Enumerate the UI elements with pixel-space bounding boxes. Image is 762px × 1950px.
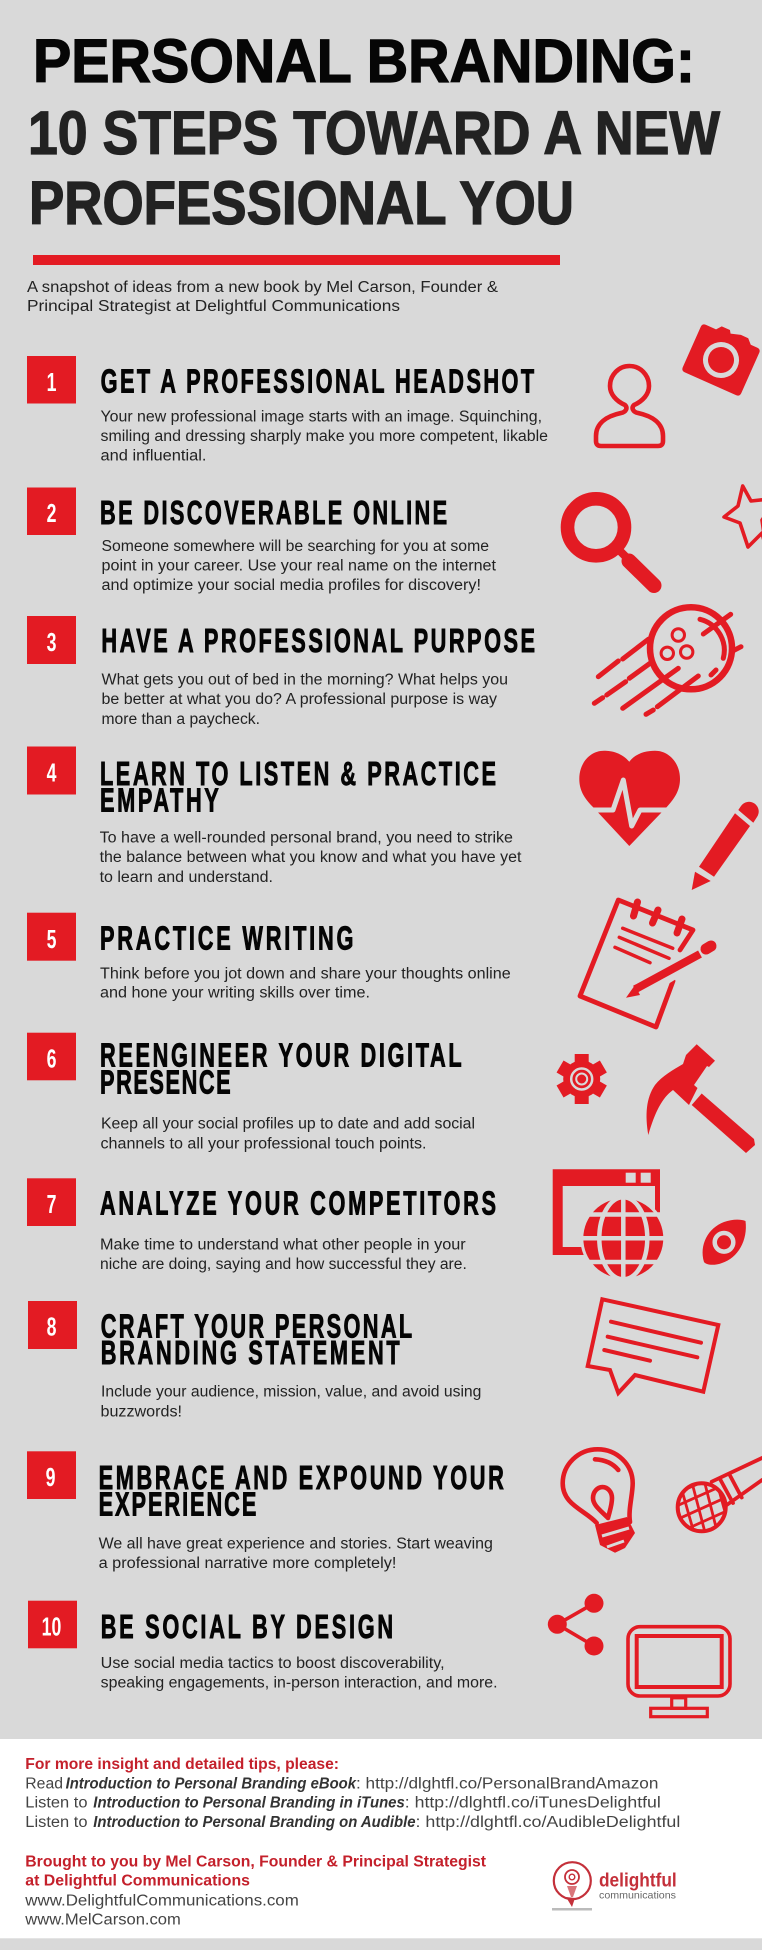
footer: more insight links: For more insight and detailed tips, please: bbox=[25, 1756, 339, 1773]
body text 1 bbox=[100, 409, 548, 464]
body text 8: buzzwords! bbox=[100, 1403, 182, 1420]
body text 3: more than a paycheck. bbox=[102, 711, 260, 728]
number badge 8: 8 bbox=[47, 1312, 56, 1341]
body text 5 bbox=[100, 965, 511, 1002]
body text 6: channels to all your professional touch points. bbox=[100, 1135, 426, 1152]
icon: pencil bbox=[692, 802, 759, 890]
title: PERSONAL BRANDING: bbox=[33, 27, 695, 95]
footer: credits: www.MelCarson.com bbox=[24, 1912, 181, 1929]
logo: delightful communications bbox=[552, 1862, 677, 1910]
icon: camera bbox=[681, 319, 762, 397]
heading 4: EMPATHY bbox=[100, 782, 219, 819]
heading 2: BE DISCOVERABLE ONLINE bbox=[100, 494, 447, 531]
footer: credits: at Delightful Communications bbox=[25, 1873, 250, 1890]
footer: credits bbox=[24, 1854, 486, 1929]
body text 10 bbox=[101, 1655, 497, 1692]
body text 2 bbox=[102, 538, 497, 594]
body text 1: smiling and dressing sharply make you more competent, likable bbox=[100, 428, 548, 445]
step 9 bbox=[27, 1451, 504, 1572]
body text 9: a professional narrative more completely! bbox=[99, 1555, 396, 1572]
heading 1: GET A PROFESSIONAL HEADSHOT bbox=[101, 363, 534, 400]
step 4 bbox=[27, 746, 522, 886]
footer: credits: Brought to you by Mel Carson, Founder & Principal Strategist bbox=[25, 1854, 486, 1871]
footer: more insight links: Introduction to Personal Branding on Audible bbox=[93, 1814, 416, 1831]
step 6 bbox=[27, 1033, 475, 1152]
subtitle: A snapshot of ideas from a new book by Mel Carson, Founder & bbox=[27, 279, 499, 296]
heading 4: LEARN TO LISTEN & PRACTICE bbox=[100, 755, 496, 792]
red title rule bbox=[33, 255, 560, 265]
body text 3: What gets you out of bed in the morning? What helps you bbox=[102, 672, 508, 689]
heading 8: BRANDING STATEMENT bbox=[101, 1334, 400, 1371]
icon: eye bbox=[703, 1220, 746, 1265]
icon: monitor bbox=[628, 1627, 730, 1717]
icon: browser window with globe bbox=[553, 1169, 667, 1281]
footer: more insight links: : http://dlghtfl.co/iTunesDelightful bbox=[405, 1795, 661, 1812]
icon: person outline bbox=[596, 366, 663, 446]
body text 4 bbox=[100, 830, 522, 886]
body text 7: niche are doing, saying and how successful they are. bbox=[100, 1256, 467, 1273]
number badge 4: 4 bbox=[47, 758, 57, 787]
heading 7: ANALYZE YOUR COMPETITORS bbox=[100, 1185, 496, 1222]
body text 7: Make time to understand what other people in your bbox=[100, 1236, 466, 1253]
body text 2: and optimize your social media profiles for discovery! bbox=[102, 577, 481, 594]
icon: notepad and pencil bbox=[580, 900, 711, 1027]
body text 4: to learn and understand. bbox=[100, 869, 273, 886]
body text 2: Someone somewhere will be searching for you at some bbox=[102, 538, 489, 555]
number badge 7 bbox=[27, 1178, 76, 1226]
number badge 5 bbox=[27, 913, 76, 961]
number badge 9 bbox=[27, 1451, 76, 1499]
body text 8: Include your audience, mission, value, and avoid using bbox=[101, 1384, 481, 1401]
body text 1: and influential. bbox=[100, 448, 206, 464]
icon: star outline bbox=[724, 486, 762, 548]
number badge 8 bbox=[28, 1301, 77, 1349]
number badge 5: 5 bbox=[47, 925, 56, 954]
icon: heart with pulse bbox=[579, 751, 680, 846]
icon: microphone bbox=[676, 1456, 762, 1534]
logo: delightful communications: communications bbox=[599, 1890, 676, 1902]
footer: more insight links: Introduction to Personal Branding eBook bbox=[66, 1775, 357, 1792]
heading 6: REENGINEER YOUR DIGITAL bbox=[100, 1037, 462, 1074]
number badge 1: 1 bbox=[47, 368, 56, 397]
footer: more insight links: : http://dlghtfl.co/PersonalBrandAmazon bbox=[356, 1775, 658, 1792]
body text 1: Your new professional image starts with an image. Squinching, bbox=[100, 409, 542, 426]
footer: more insight links bbox=[25, 1756, 680, 1831]
body text 6: Keep all your social profiles up to date and add social bbox=[101, 1116, 475, 1133]
body text 3 bbox=[102, 672, 508, 728]
icon: speech bubble bbox=[588, 1299, 718, 1393]
step 7 bbox=[27, 1178, 496, 1273]
body text 7 bbox=[100, 1236, 467, 1273]
heading 4 bbox=[100, 755, 496, 819]
footer: more insight links: Listen to bbox=[25, 1795, 88, 1812]
heading 9: EXPERIENCE bbox=[99, 1486, 256, 1522]
icon: comet bbox=[594, 607, 741, 714]
body text 9: We all have great experience and stories. Start weaving bbox=[99, 1535, 493, 1552]
heading 6 bbox=[100, 1037, 462, 1100]
number badge 10 bbox=[28, 1601, 77, 1648]
number badge 1 bbox=[27, 356, 76, 404]
subtitle: Principal Strategist at Delightful Communications bbox=[27, 298, 400, 315]
number badge 6: 6 bbox=[47, 1044, 56, 1073]
footer: credits: www.DelightfulCommunications.com bbox=[24, 1892, 299, 1909]
number badge 9: 9 bbox=[46, 1463, 55, 1492]
title: PROFESSIONAL YOU bbox=[29, 169, 574, 237]
number badge 10: 10 bbox=[42, 1612, 61, 1641]
number badge 2: 2 bbox=[47, 499, 56, 528]
number badge 2 bbox=[27, 488, 76, 535]
number badge 3 bbox=[27, 616, 76, 664]
icon: light bulb bbox=[563, 1449, 635, 1553]
heading 8: CRAFT YOUR PERSONAL bbox=[101, 1308, 412, 1344]
footer: more insight links: : http://dlghtfl.co/AudibleDelightful bbox=[416, 1814, 680, 1831]
body text 3: be better at what you do? A professional purpose is way bbox=[102, 691, 497, 708]
body text 5: and hone your writing skills over time. bbox=[100, 984, 370, 1002]
number badge 6 bbox=[27, 1033, 76, 1080]
number badge 3: 3 bbox=[47, 628, 56, 657]
footer: more insight links: Read bbox=[25, 1775, 63, 1792]
icon: hammer bbox=[647, 1044, 755, 1153]
icon: share nodes bbox=[548, 1594, 604, 1656]
body text 2: point in your career. Use your real name on the internet bbox=[102, 558, 497, 575]
step 8 bbox=[28, 1301, 481, 1420]
body text 9 bbox=[99, 1535, 493, 1572]
heading 3: HAVE A PROFESSIONAL PURPOSE bbox=[101, 622, 535, 659]
footer: more insight links: Listen to bbox=[25, 1814, 88, 1831]
footer: more insight links: Introduction to Personal Branding in iTunes bbox=[93, 1795, 405, 1812]
body text 10: speaking engagements, in-person interaction, and more. bbox=[101, 1675, 497, 1692]
body text 5: Think before you jot down and share your thoughts online bbox=[100, 965, 511, 982]
step 2 bbox=[27, 488, 497, 594]
number badge 4 bbox=[27, 746, 76, 794]
step 10 bbox=[28, 1601, 498, 1692]
step 3 bbox=[27, 616, 535, 728]
step 1 bbox=[27, 356, 548, 464]
body text 8 bbox=[100, 1384, 481, 1420]
heading 10: BE SOCIAL BY DESIGN bbox=[101, 1608, 393, 1645]
heading 8 bbox=[101, 1308, 412, 1371]
body text 4: To have a well-rounded personal brand, you need to strike bbox=[100, 830, 513, 847]
icon: magnifying glass bbox=[568, 499, 654, 586]
heading 5: PRACTICE WRITING bbox=[100, 920, 353, 956]
heading 9 bbox=[99, 1459, 504, 1522]
subtitle bbox=[27, 279, 499, 315]
footer panel bbox=[0, 1739, 762, 1938]
body text 4: the balance between what you know and what you have yet bbox=[100, 849, 522, 866]
title bbox=[28, 27, 720, 237]
body text 6 bbox=[100, 1116, 475, 1152]
logo: delightful communications: delightful bbox=[599, 1871, 677, 1892]
icon: gear bbox=[557, 1054, 607, 1104]
step 5 bbox=[27, 913, 511, 1002]
heading 6: PRESENCE bbox=[100, 1064, 231, 1100]
number badge 7: 7 bbox=[47, 1190, 56, 1219]
body text 10: Use social media tactics to boost discoverability, bbox=[101, 1655, 445, 1672]
heading 9: EMBRACE AND EXPOUND YOUR bbox=[99, 1459, 504, 1496]
